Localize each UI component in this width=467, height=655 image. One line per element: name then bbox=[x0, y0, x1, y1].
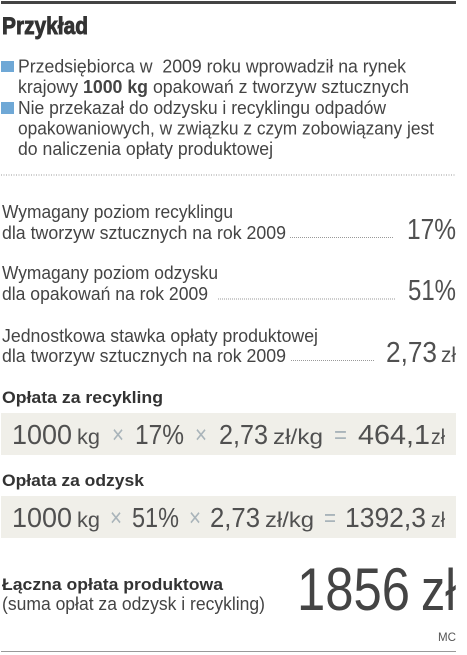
formula band: recycling fee: kg bbox=[77, 426, 100, 449]
formula band: recycling fee: × bbox=[112, 421, 124, 449]
bullet 2: Nie przekazał do odzysku i recyklingu odpadów bbox=[18, 98, 387, 118]
formula band: recovery fee: 1392,3 bbox=[345, 502, 426, 533]
bullet 2: opakowaniowych, w związku z czym zobowiązany jest bbox=[18, 118, 434, 138]
total label: (suma opłat za odzysk i recykling) bbox=[2, 594, 265, 614]
bullet 2: do naliczenia opłaty produktowej bbox=[18, 139, 273, 159]
formula band: recovery fee: kg bbox=[77, 509, 100, 532]
formula band: recovery fee: = bbox=[324, 504, 336, 532]
bullet 1: Przedsiębiorca w 2009 roku wprowadził na rynek bbox=[18, 56, 407, 76]
formula band: recovery fee: 1000 bbox=[12, 502, 72, 533]
row: recovery level bbox=[2, 263, 456, 307]
value: 17%: 17% bbox=[407, 214, 456, 246]
row: recycling level: dla tworzyw sztucznych na rok 2009 bbox=[2, 223, 286, 243]
formula band: recovery fee: × bbox=[110, 504, 122, 532]
value: 2,73 zł: 2,73 bbox=[386, 337, 437, 369]
bullet 1: krajowy 1000 kg opakowań z tworzyw sztucznych bbox=[18, 77, 409, 97]
formula band: recycling fee bbox=[1, 413, 456, 455]
formula band: recycling fee: 464,1 bbox=[358, 419, 430, 450]
total label: Łączna opłata produktowa bbox=[2, 575, 224, 594]
formula band: recovery fee: zł bbox=[431, 509, 445, 532]
formula band: recycling fee: 2,73 bbox=[219, 419, 268, 450]
formula band: recovery fee: 2,73 bbox=[210, 502, 260, 533]
formula band: recycling fee: = bbox=[334, 421, 347, 449]
row: unit rate bbox=[2, 326, 456, 369]
formula band: recycling fee: × bbox=[195, 421, 207, 449]
value: 2,73 zł: zł bbox=[441, 344, 456, 367]
row: unit rate: Jednostkowa stawka opłaty produktowej bbox=[2, 326, 318, 346]
row: recovery level: dla opakowań na rok 2009 bbox=[2, 284, 208, 304]
formula band: recovery fee: 51% bbox=[132, 502, 179, 533]
formula band: recovery fee: zł/kg bbox=[265, 509, 314, 532]
bullet 2 bbox=[1, 98, 434, 159]
formula band: recovery fee: × bbox=[189, 504, 201, 532]
row: recycling level: Wymagany poziom recyklingu bbox=[2, 202, 233, 222]
total label bbox=[2, 575, 265, 614]
source credit: MC bbox=[438, 632, 456, 644]
row: recycling level bbox=[2, 202, 456, 246]
bullet 1 bbox=[1, 56, 409, 97]
formula band: recycling fee: 17% bbox=[135, 419, 184, 450]
formula band: recycling fee: zł/kg bbox=[273, 426, 323, 449]
formula band: recycling fee: 1000 bbox=[12, 419, 72, 450]
value: 51%: 51% bbox=[408, 275, 456, 307]
row: recovery level: Wymagany poziom odzysku bbox=[2, 263, 218, 283]
total value: 1856 bbox=[297, 556, 410, 623]
heading: recycling fee: Opłata za recykling bbox=[2, 388, 163, 407]
total value: zł bbox=[421, 558, 456, 623]
intro bullet list bbox=[1, 56, 434, 159]
heading: recovery fee: Opłata za odzysk bbox=[2, 471, 145, 490]
row: unit rate: dla tworzyw sztucznych na rok 2009 bbox=[2, 346, 286, 366]
formula band: recovery fee bbox=[1, 496, 456, 538]
formula band: recycling fee: zł bbox=[431, 426, 445, 449]
title: Przykład bbox=[2, 13, 88, 40]
